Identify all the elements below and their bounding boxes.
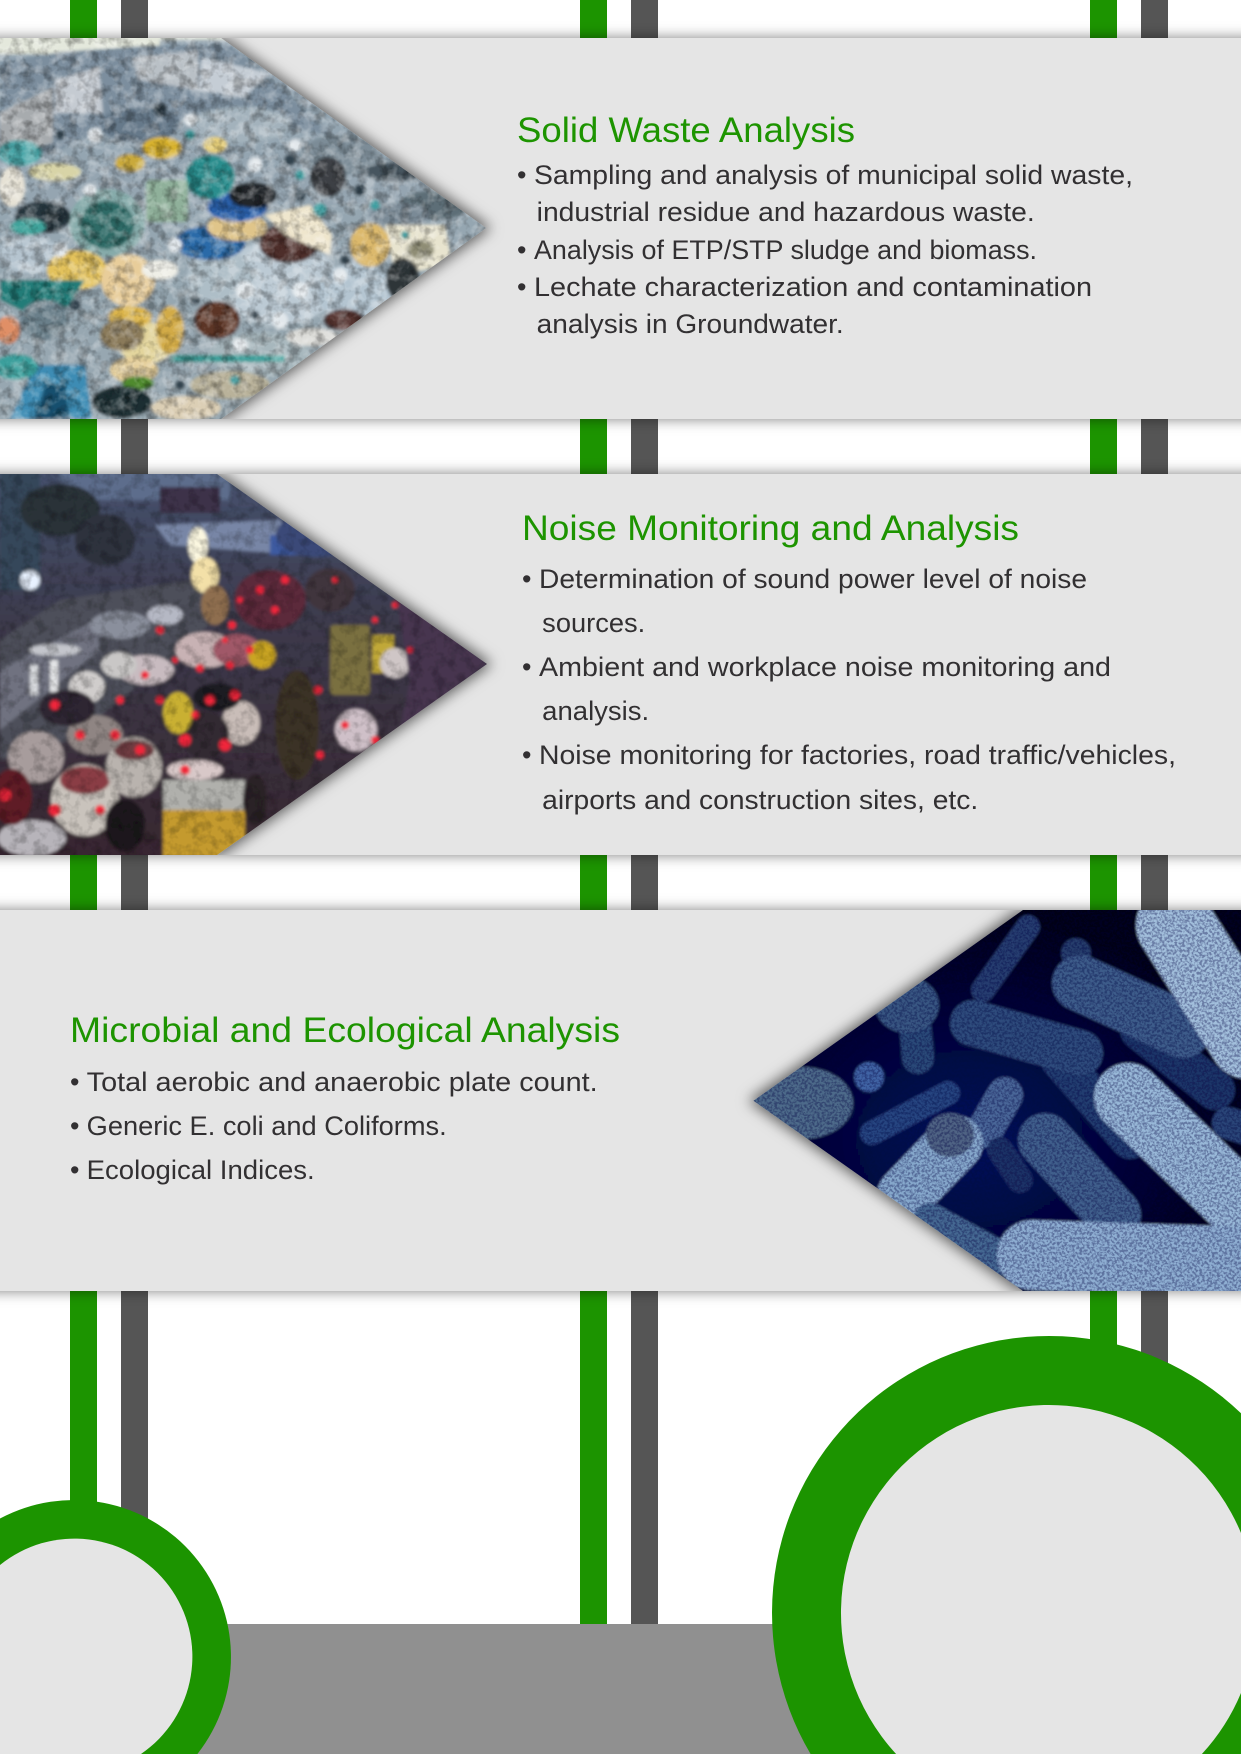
bullet list: solid waste analysis: Sampling and analysis of municipal solid waste, — [534, 160, 1133, 190]
vertical stripes: left pair — [70, 0, 148, 1530]
bullet list: noise monitoring: airports and construction sites, etc. — [542, 785, 978, 815]
bullet list: noise monitoring: • — [522, 564, 531, 594]
panel: microbial and ecological analysis — [0, 905, 1241, 1295]
bullet list: solid waste analysis: industrial residue and hazardous waste. — [537, 197, 1035, 227]
bullet list: microbial analysis — [70, 1067, 598, 1185]
heading: noise monitoring and analysis: Noise Monitoring and Analysis — [522, 509, 1019, 548]
bullet list: solid waste analysis: Analysis of ETP/STP sludge and biomass. — [534, 235, 1037, 265]
bullet list: solid waste analysis: Lechate characterization and contamination — [534, 272, 1092, 302]
bullet list: microbial analysis: Total aerobic and anaerobic plate count. — [87, 1067, 598, 1097]
heading: solid waste analysis: Solid Waste Analysis — [517, 111, 855, 150]
large green ring — [772, 1336, 1241, 1754]
photo: plastic waste pile — [0, 30, 500, 430]
vertical stripes: middle pair — [580, 0, 658, 1624]
panel: solid waste analysis — [0, 38, 1130, 419]
bullet list: microbial analysis: • — [70, 1111, 79, 1141]
photo: bacteria micrograph — [745, 905, 1241, 1295]
bullet list: noise monitoring: • — [522, 740, 531, 770]
bullet list: solid waste analysis: • — [517, 235, 526, 265]
bullet list: microbial analysis: • — [70, 1155, 79, 1185]
vertical stripes: right pair — [1090, 0, 1168, 1370]
bullet list: noise monitoring: Determination of sound power level of noise — [539, 564, 1087, 594]
heading: microbial and ecological analysis: Microbial and Ecological Analysis — [70, 1011, 620, 1050]
bullet list: solid waste analysis: analysis in Groundwater. — [537, 309, 844, 339]
footer grey band — [0, 1624, 1241, 1754]
bullet list: noise monitoring: analysis. — [542, 696, 649, 726]
bullet list: noise monitoring — [522, 564, 1176, 815]
bullet list: noise monitoring: • — [522, 652, 531, 682]
bullet list: noise monitoring: Ambient and workplace noise monitoring and — [539, 652, 1111, 682]
bullet list: microbial analysis: • — [70, 1067, 79, 1097]
bullet list: solid waste analysis — [517, 160, 1133, 339]
photo: road traffic at dusk — [0, 470, 500, 860]
bullet list: microbial analysis: Ecological Indices. — [87, 1155, 315, 1185]
bullet list: solid waste analysis: • — [517, 272, 526, 302]
bullet list: solid waste analysis: • — [517, 160, 526, 190]
panel: noise monitoring and analysis — [0, 470, 1241, 860]
bullet list: noise monitoring: Noise monitoring for factories, road traffic/vehicles, — [539, 740, 1176, 770]
bullet list: noise monitoring: sources. — [542, 608, 645, 638]
bullet list: microbial analysis: Generic E. coli and Coliforms. — [87, 1111, 447, 1141]
small green ring — [0, 1500, 231, 1754]
